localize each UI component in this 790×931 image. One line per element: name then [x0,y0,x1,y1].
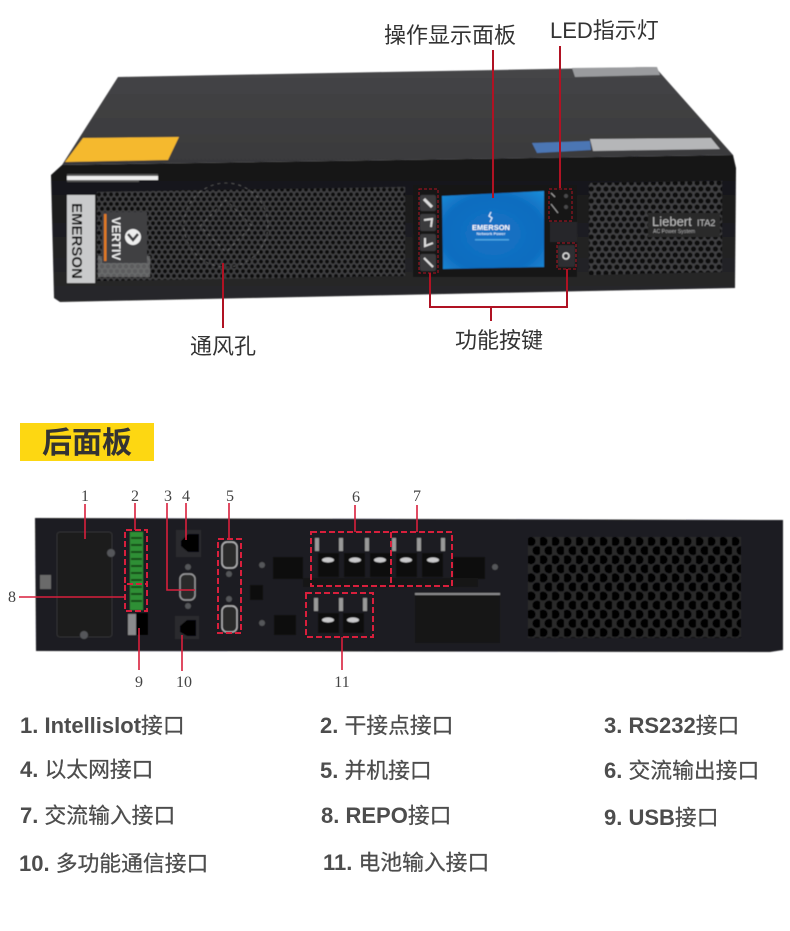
device top surface [62,67,733,165]
legend list: 6. 交流输出接口 [604,758,759,783]
legend list: 9. USB接口 [604,805,719,830]
control panel [413,185,577,277]
label: 操作显示面板: 操作显示面板 [384,23,516,48]
callout lines: front panel [223,46,576,328]
ethernet port [176,530,201,557]
rear panel numbers: 9 [135,674,143,691]
USB port [128,613,148,635]
rear panel numbers [8,488,421,691]
rear panel numbers: 2 [131,488,139,505]
rear panel numbers: 6 [352,489,360,506]
green terminal block [130,532,143,610]
Liebert branding: ITA2 [697,218,715,228]
photo: UPS rear view [35,518,783,652]
Liebert branding: Liebert [652,214,692,229]
warning label [67,174,158,182]
sticker: rear label [572,67,660,77]
label: 通风孔: 通风孔 [190,334,256,359]
Vertiv badge [98,212,150,277]
legend list: 5. 并机接口 [320,758,432,783]
rear panel numbers: 4 [182,488,190,505]
legend list: 10. 多功能通信接口 [19,851,208,876]
device front face [51,155,736,302]
function buttons [420,195,436,271]
fan outline [184,183,268,267]
AC terminals [317,538,443,577]
right vent grille [589,181,722,275]
photo: UPS front view [51,67,736,302]
callout lines: rear panel [19,503,452,671]
Emerson badge: EMERSON [68,203,85,279]
LED indicators [551,193,568,213]
legend list: 3. RS232接口 [604,713,739,738]
rear panel numbers: 11 [334,674,350,691]
Vertiv badge: VERTIV [109,217,123,260]
RS232 port [180,564,195,609]
parallel port B [222,596,237,632]
left vent grille [97,183,405,281]
legend list: 11. 电池输入接口 [323,850,489,875]
sticker: blue [532,141,591,153]
rear panel numbers: 8 [8,589,16,606]
rear panel numbers: 3 [164,488,172,505]
rear panel numbers: 7 [413,488,421,505]
intellislot cover [40,532,115,639]
legend list: 2. 干接点接口 [320,713,453,738]
parallel port A [222,542,237,577]
honeycomb vent [528,537,741,638]
screen [442,191,544,269]
screen: Network Power [477,231,506,236]
legend list: 8. REPO接口 [321,803,451,828]
rear panel numbers: 1 [81,488,89,505]
label: 功能按键: 功能按键 [455,328,543,353]
sticker: yellow [65,137,179,162]
rear panel numbers: 5 [226,488,234,505]
blocks and screws [250,557,500,643]
power button [558,245,575,267]
Liebert branding [648,213,720,237]
legend list: 4. 以太网接口 [20,757,153,782]
sticker: white [590,138,720,151]
Emerson badge [67,195,95,283]
legend list: 7. 交流输入接口 [20,803,175,828]
heading: 后面板: 后面板 [42,427,132,460]
chassis [35,518,783,652]
rear panel numbers: 10 [176,674,192,691]
Liebert branding: AC Power System [653,229,695,235]
legend list [19,713,759,876]
legend list: 1. Intellislot接口 [20,713,185,738]
battery terminals [316,598,365,633]
heading: 后面板 [20,423,154,461]
label: LED指示灯: LED指示灯 [550,18,659,43]
screen: EMERSON [472,223,510,232]
multi-function port [175,616,199,639]
